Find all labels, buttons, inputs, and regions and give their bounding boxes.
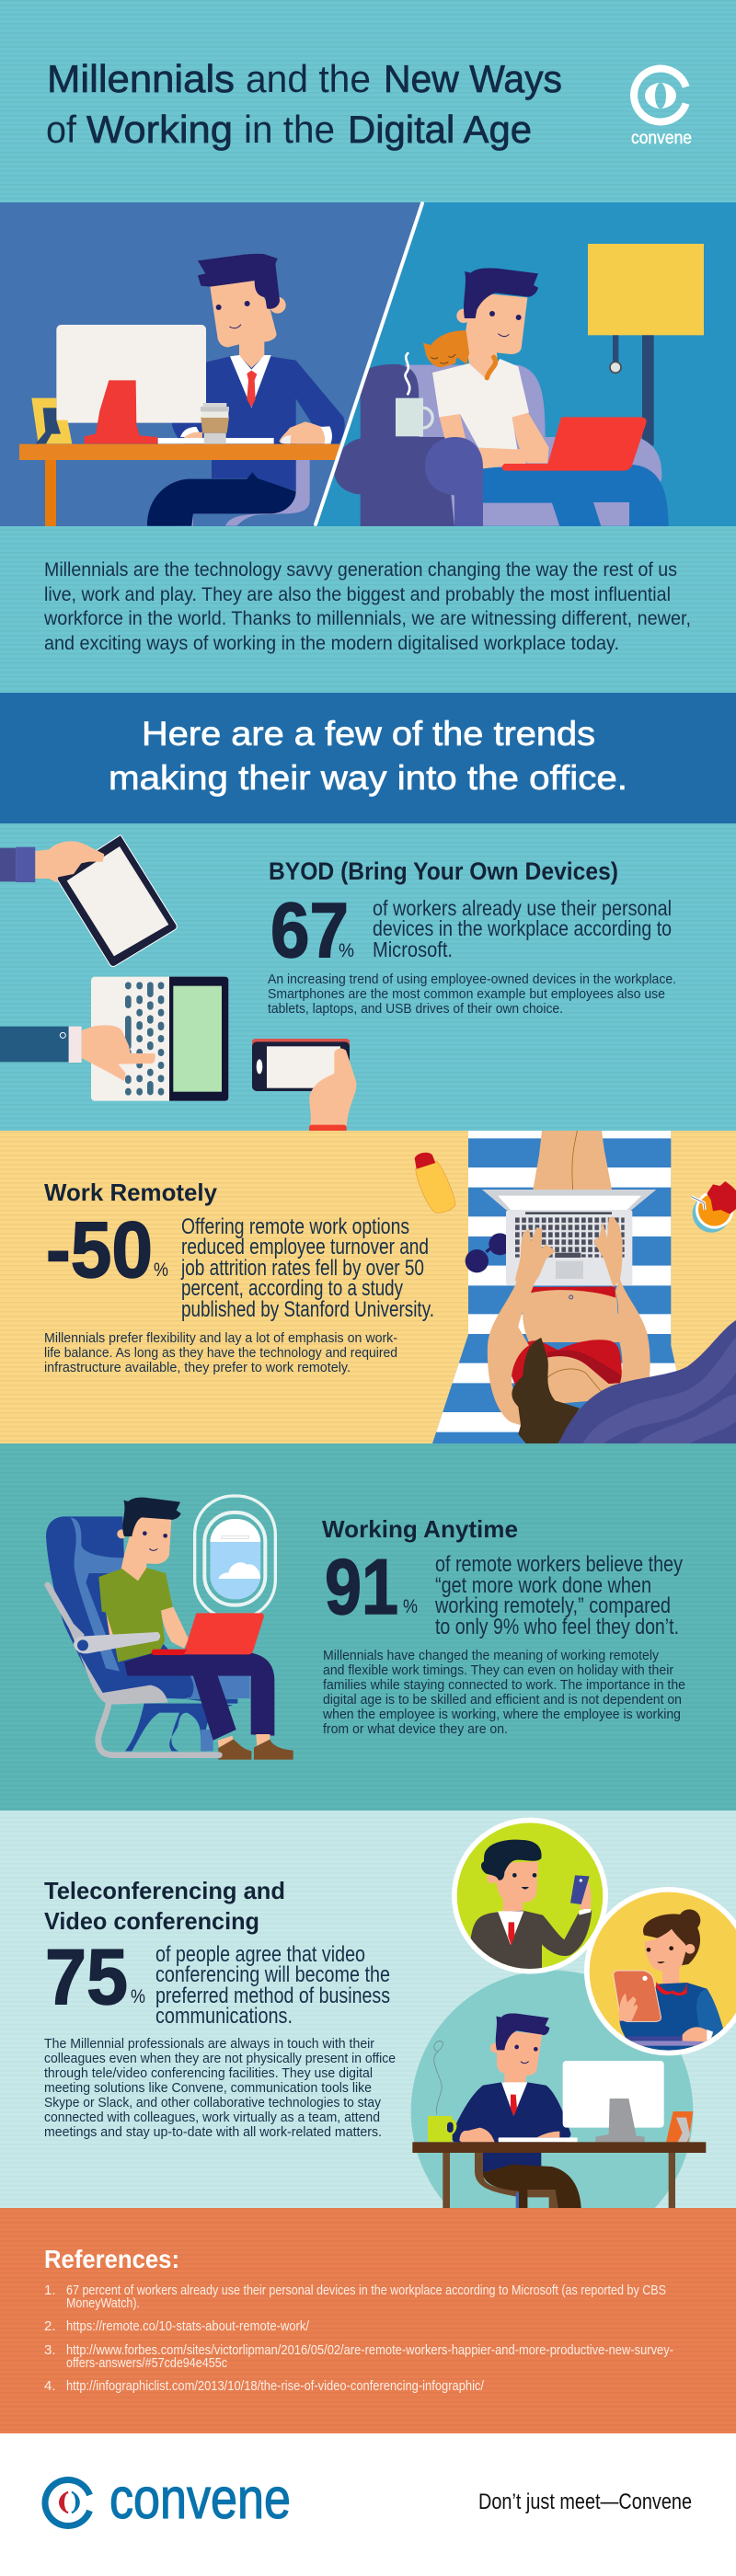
panel: working anytime: [0, 1443, 736, 1811]
stat description: communications.: [155, 2004, 293, 2029]
body text: through tele/video conferencing facilities. They use digital: [44, 2065, 373, 2081]
illustration: woman on beach towel: [415, 1131, 736, 1443]
stat description: conferencing will become the: [155, 1962, 390, 1987]
stat description: of people agree that video: [155, 1942, 365, 1967]
logo: convene white: convene: [631, 129, 692, 148]
stat: 75%: 75: [45, 1934, 128, 2021]
person: [98, 1498, 293, 1760]
intro text: and exciting ways of working in the modern digitalised workplace today.: [44, 633, 619, 654]
body text: [322, 1648, 685, 1737]
body text: An increasing trend of using employee-owned devices in the workplace.: [268, 972, 676, 987]
title: Working: [86, 108, 233, 151]
icon: drink: [692, 1181, 736, 1233]
body text: Millennials have changed the meaning of working remotely: [323, 1648, 659, 1663]
woman figure: [482, 1131, 656, 1443]
icon: sunglasses: [466, 1233, 511, 1272]
title: [46, 57, 562, 151]
body text: [44, 1330, 397, 1375]
panel: hero illustration: [0, 202, 736, 526]
title: Millennials: [47, 57, 235, 100]
title: of: [46, 108, 76, 151]
heading: work remotely: Work Remotely: [44, 1179, 218, 1206]
stat description: to only 9% who feel they don’t.: [435, 1615, 679, 1639]
illustration: man in airplane seat: [44, 1496, 293, 1760]
banner heading: [109, 715, 627, 797]
stat description: published by Stanford University.: [181, 1297, 434, 1322]
body text: infrastructure available, they prefer to work remotely.: [44, 1360, 351, 1375]
reference list: offers-answers/#57cde94e455c: [66, 2355, 227, 2371]
stat description: percent, according to a study: [181, 1276, 403, 1301]
stat description: of remote workers believe they: [435, 1552, 683, 1577]
stat description: [155, 1942, 390, 2029]
body text: when the employee is working, where the employee is working: [322, 1707, 681, 1722]
body text: Smartphones are the most common example but employees also use: [268, 986, 665, 1002]
heading: teleconferencing: Video conferencing: [44, 1907, 259, 1935]
stat: 67%: 67: [270, 887, 349, 973]
reference list: [44, 2283, 673, 2394]
reference list: MoneyWatch).: [66, 2295, 140, 2311]
reference list: 4.: [44, 2378, 56, 2394]
stat description: Microsoft.: [373, 937, 453, 961]
banner heading: making their way into the office.: [109, 759, 627, 797]
panel: footer: [0, 2433, 736, 2576]
body text: Millennials prefer flexibility and lay a lot of emphasis on work-: [44, 1330, 397, 1346]
reference list: 2.: [44, 2318, 56, 2334]
heading: BYOD: BYOD (Bring Your Own Devices): [269, 857, 618, 885]
office worker scene: [19, 254, 345, 526]
body text: colleagues even when they are not physically present in office: [44, 2051, 396, 2066]
body text: The Millennial professionals are always in touch with their: [44, 2036, 374, 2052]
icon: keyboard device and hand: [0, 977, 228, 1101]
seat: [46, 1516, 250, 1751]
stat description: of workers already use their personal: [373, 896, 672, 920]
body text: digital age is to be skilled and efficient and is not dependent on: [323, 1692, 682, 1708]
title: Digital Age: [348, 108, 532, 151]
panel: teleconferencing: [0, 1811, 736, 2208]
body text: [268, 972, 676, 1017]
icon: tablet and hand: [0, 835, 177, 967]
title: in the: [244, 108, 335, 151]
heading: teleconferencing: Teleconferencing and: [44, 1877, 285, 1904]
stat description: devices in the workplace according to: [373, 916, 672, 940]
stat: -50%: -50: [46, 1206, 153, 1294]
seat frame: [44, 1582, 219, 1755]
stat description: [434, 1552, 683, 1639]
intro text: live, work and play. They are also the biggest and probably the most influential: [44, 584, 671, 605]
panel: BYOD: [0, 823, 736, 1133]
body text: from or what device they are on.: [323, 1721, 508, 1737]
heading: working anytime: Working Anytime: [322, 1515, 518, 1543]
heading: teleconferencing: [44, 1877, 285, 1935]
stat: 91%: %: [403, 1596, 418, 1617]
reference list: 1.: [44, 2283, 56, 2298]
heading: references: References:: [44, 2245, 179, 2273]
stat description: Offering remote work options: [181, 1214, 409, 1239]
stat description: [373, 896, 672, 961]
intro text: workforce in the world. Thanks to millennials, we are witnessing different, newer,: [43, 608, 691, 629]
stat: -50%: %: [154, 1259, 168, 1281]
body text: families while staying connected to work. The importance in the: [323, 1677, 685, 1693]
stat description: reduced employee turnover and: [181, 1235, 429, 1259]
logo: convene: [45, 2467, 291, 2531]
illustration: devices: [0, 835, 356, 1133]
reference list: https://remote.co/10-stats-about-remote-work/: [66, 2318, 310, 2334]
icon: sunscreen bottle: [415, 1153, 455, 1213]
logo: convene: convene: [109, 2467, 291, 2531]
illustration: video conference circles: [410, 1818, 736, 2208]
stat description: job attrition rates fell by over 50: [180, 1256, 424, 1281]
body text: meetings and stay up-to-date with all work-related matters.: [44, 2124, 382, 2140]
icon: phone and hand: [252, 1039, 356, 1133]
stat description: working remotely,” compared: [434, 1593, 671, 1618]
blanket: [558, 1320, 736, 1443]
body text: [44, 2036, 396, 2140]
stat: 67%: %: [339, 940, 354, 961]
panel: header: [0, 0, 736, 204]
big circle with man at desk: [410, 1971, 707, 2208]
body text: connected with colleagues, work virtually as a team, attend: [44, 2110, 380, 2125]
body text: tablets, laptops, and USB drives of their own choice.: [268, 1001, 563, 1017]
title: and the: [246, 57, 371, 100]
body text: meeting solutions like Convene, communication tools like: [44, 2080, 372, 2096]
stat description: preferred method of business: [155, 1984, 390, 2008]
panel: work remotely: [0, 1131, 736, 1443]
panel: intro: [0, 526, 736, 694]
intro text: Millennials are the technology savvy generation changing the way the rest of us: [44, 559, 677, 581]
tagline: Don’t just meet—Convene: [478, 2490, 692, 2514]
circle: woman with tablet: [584, 1887, 736, 2055]
divider line: [316, 203, 422, 524]
logo: convene white: [631, 68, 692, 148]
banner heading: Here are a few of the trends: [142, 715, 595, 753]
reference list: 3.: [44, 2342, 56, 2358]
reference list: http://infographiclist.com/2013/10/18/the-rise-of-video-conferencing-infographic/: [66, 2378, 485, 2394]
home worker scene: [334, 244, 704, 526]
panel: references: [0, 2208, 736, 2433]
stat description: [180, 1214, 434, 1322]
body text: life balance. As long as they have the technology and required: [44, 1345, 397, 1361]
stat: 91%: 91: [325, 1544, 398, 1631]
stat description: “get more work done when: [435, 1573, 651, 1598]
panel: trends banner: [0, 693, 736, 823]
icon: airplane window: [195, 1496, 275, 1618]
intro text: [43, 559, 691, 654]
stat: 75%: %: [131, 1986, 145, 2007]
circle: man with phone: [452, 1818, 608, 1974]
body text: and flexible work timings. They can even on holiday with their: [323, 1662, 673, 1678]
body text: Skype or Slack, and other collaborative technologies to stay: [44, 2095, 381, 2110]
title: New Ways: [384, 57, 562, 100]
